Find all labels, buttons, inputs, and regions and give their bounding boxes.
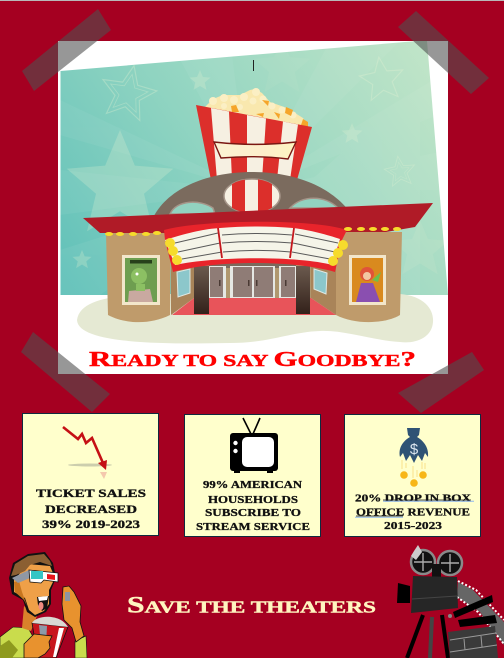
neck: [22, 606, 37, 631]
head: [9, 552, 56, 617]
tape: bottom right: [398, 352, 484, 413]
shirt: [0, 627, 36, 658]
left poster: [122, 255, 160, 305]
revenue text: 20% DROP IN BOX: [355, 494, 472, 504]
ticket sales text: 39% 2019-2023: [42, 519, 140, 531]
streaming text: HOUSEHOLDS: [208, 495, 298, 506]
marquee: [164, 222, 347, 272]
illustration: man with 3D glasses and popcorn: [0, 552, 87, 658]
right tower: [311, 232, 402, 322]
card: streaming households: [184, 414, 320, 536]
ticket sales text: TICKET SALES: [36, 488, 146, 500]
right window: [314, 269, 327, 294]
roof: [83, 203, 433, 233]
entrance: [172, 260, 336, 315]
revenue text: [355, 494, 474, 532]
tape: top left: [22, 9, 111, 91]
slogan: S AVE THE THEATERS: [127, 592, 376, 618]
popcorn: [200, 88, 309, 127]
marquee bulbs: [105, 227, 401, 266]
raised hand: [62, 586, 84, 642]
streaming text: 99% AMERICAN: [203, 480, 302, 491]
card: box office revenue: [344, 414, 480, 536]
streaming text: [196, 480, 310, 533]
revenue text: 2015-2023: [384, 521, 442, 532]
icon: television: [230, 418, 278, 473]
title: R EADY TO SAY G OODBYE ?: [89, 347, 416, 371]
streaming text: STREAM SERVICE: [196, 522, 310, 533]
illustration: film camera and clapperboard: [397, 545, 504, 658]
revenue text: OFFICE REVENUE: [356, 508, 470, 518]
tape: top right: [398, 11, 489, 94]
dome: [154, 172, 346, 215]
popcorn box: [196, 105, 312, 180]
poster image: movie theater: [58, 38, 450, 374]
popcorn box held: [32, 623, 68, 658]
ticket sales text: DECREASED: [45, 504, 137, 516]
left window: [177, 269, 190, 297]
icon: money bag with falling coins: $: [410, 441, 419, 458]
right poster: [349, 255, 386, 305]
streaming text: SUBSCRIBE TO: [205, 508, 301, 519]
tape: bottom left: [21, 332, 110, 412]
sky background with rays and stars: [58, 38, 450, 297]
icon: falling line arrow: [63, 427, 112, 479]
ticket sales text: [36, 488, 146, 531]
ground: [77, 294, 433, 343]
left tower: [106, 233, 194, 322]
card: ticket sales: [22, 414, 158, 536]
text cursor mark: [253, 60, 254, 71]
